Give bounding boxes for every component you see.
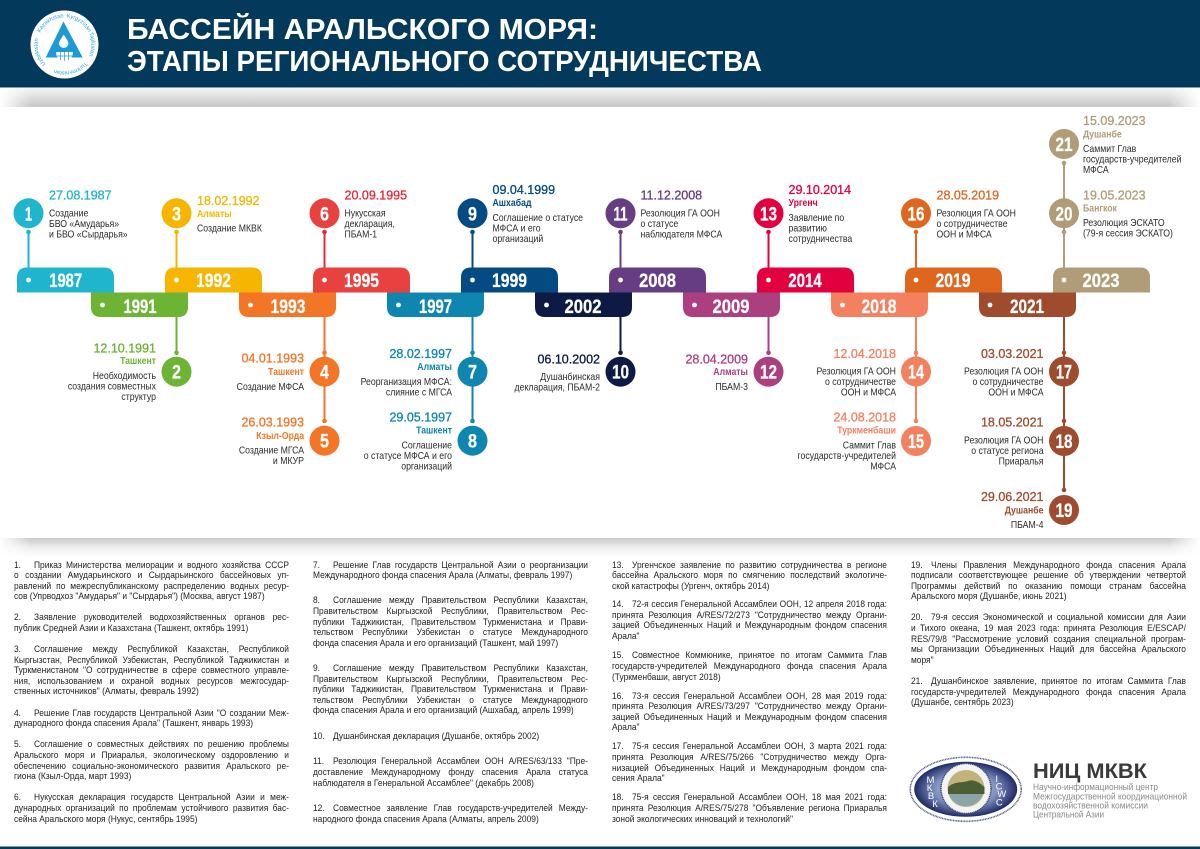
event 16: 28.05.2019 — [936, 188, 999, 202]
event 2 — [68, 317, 192, 402]
year block 1997: 1997 — [419, 296, 452, 318]
events 14 and 15: Саммит Глав — [843, 440, 896, 451]
logo: ICWC emblem: К — [927, 783, 933, 794]
year block 2002: 2002 — [564, 296, 602, 318]
events 4 and 5 — [237, 317, 340, 466]
events 7 and 8: Алматы — [417, 362, 452, 372]
event 16: 16 — [908, 203, 925, 225]
event 12: 28.04.2009 — [685, 352, 748, 366]
event 13: развитию — [788, 223, 827, 234]
ICWC organisation name: НИЦ МКВК — [1033, 760, 1147, 783]
event 3: Создание МКВК — [197, 223, 262, 234]
year block 2018: 2018 — [862, 296, 897, 318]
event 13: Ургенч — [788, 198, 818, 208]
event 9: Ашхабад — [493, 198, 532, 208]
events 4 and 5: 4 — [320, 362, 329, 384]
footnote 7 — [313, 561, 588, 581]
year block 1991: 1991 — [124, 296, 157, 318]
events 20 and 21: государств-учредителей — [1083, 154, 1181, 165]
logo: ICWC emblem: В — [928, 791, 934, 802]
event 6: 6 — [320, 203, 329, 225]
events 14 and 15: ООН и МФСА — [841, 387, 897, 398]
logo: ICWC emblem: W — [997, 789, 1006, 800]
event 3 — [162, 194, 262, 268]
event 3: 3 — [172, 203, 181, 225]
events 17, 18 and 19: Резолюция ГА ООН — [964, 435, 1044, 446]
event 1: Создание — [49, 208, 88, 219]
events 20 and 21: МФСА — [1083, 165, 1109, 175]
event 1: 1 — [25, 203, 32, 225]
event 3: Алматы — [197, 209, 232, 219]
footnote 8 — [313, 596, 588, 649]
events 14 and 15: 15 — [908, 431, 924, 453]
events 7 and 8: 29.05.1997 — [389, 410, 452, 424]
event 16: Резолюция ГА ООН — [936, 208, 1016, 219]
footnote 2 — [14, 613, 289, 634]
event 9: Соглашение о статусе — [493, 213, 583, 223]
year block 2021: 2021 — [1010, 296, 1044, 318]
title: БАССЕЙН АРАЛЬСКОГО МОРЯ: — [127, 12, 598, 46]
events 20 and 21: Бангкок — [1083, 203, 1117, 214]
footnote 18 — [612, 793, 887, 825]
event 16: ООН и МФСА — [936, 229, 993, 240]
footnote 4 — [14, 709, 289, 729]
year block 2019 — [905, 268, 1002, 292]
event 2: создания совместных — [68, 381, 156, 392]
events 14 and 15: государств-учредителей — [798, 451, 896, 461]
event 6: ПБАМ-1 — [345, 229, 377, 240]
event 11: о статусе — [640, 219, 678, 229]
event 2: структур — [121, 392, 156, 402]
events 17, 18 and 19: ПБАМ-4 — [1011, 520, 1043, 530]
events 20 and 21: 19.05.2023 — [1083, 188, 1146, 202]
events 17, 18 and 19: 18.05.2021 — [981, 416, 1044, 430]
events 4 and 5: 04.01.1993 — [241, 352, 304, 366]
events 7 and 8: 7 — [468, 362, 477, 384]
ICWC organisation name: водохозяйственной комиссии — [1033, 800, 1148, 810]
event 10 — [515, 317, 636, 393]
footnote 19 — [911, 561, 1186, 602]
year block 2008: 2008 — [639, 270, 676, 292]
events 4 and 5: 26.03.1993 — [241, 416, 304, 430]
year block 2021 — [979, 292, 1076, 318]
event 6: Нукусская — [345, 208, 386, 219]
events 14 and 15: Туркменбаши — [837, 425, 896, 436]
event 12: Алматы — [713, 367, 748, 377]
event 6: 20.09.1995 — [344, 188, 407, 202]
events 7 and 8: слияние с МГСА — [386, 387, 453, 398]
footnote 12 — [313, 804, 588, 825]
year block 1995: 1995 — [344, 270, 379, 292]
event 10: 06.10.2002 — [537, 352, 600, 366]
year block 1991 — [91, 292, 188, 318]
event 9: 09.04.1999 — [492, 183, 555, 197]
events 7 and 8: Ташкент — [416, 425, 452, 436]
logo: IFAS emblem: TurkmenistanUzbekistanKazakhstan Kyrgyzstan Tajikistan — [34, 14, 96, 76]
title: ЭТАПЫ РЕГИОНАЛЬНОГО СОТРУДНИЧЕСТВА — [127, 46, 762, 78]
event 13: Заявление по — [788, 213, 844, 223]
event 13: 13 — [760, 203, 777, 225]
year block 1999: 1999 — [492, 270, 527, 292]
logo: ICWC emblem: C — [996, 798, 1003, 808]
footnote 13 — [612, 561, 887, 592]
year block 2014: 2014 — [788, 270, 822, 292]
event 1: БВО «Амударья» — [49, 219, 119, 229]
events 4 and 5: и МКУР — [273, 456, 304, 466]
event 9 — [458, 183, 583, 268]
year block 1997 — [387, 292, 484, 318]
ICWC organisation name: Центральной Азии — [1033, 810, 1104, 820]
footnote 11 — [313, 757, 588, 789]
events 20 and 21: 21 — [1056, 134, 1073, 156]
events 20 and 21: (79-я сессия ЭСКАТО) — [1083, 228, 1173, 239]
year block 1993 — [239, 292, 336, 318]
footnote 1 — [14, 561, 289, 602]
event 9: организаций — [493, 234, 543, 244]
events 4 and 5: 5 — [320, 431, 329, 453]
year block 2023: 2023 — [1082, 270, 1120, 292]
events 17, 18 and 19: Приаралья — [999, 456, 1043, 467]
header banner — [0, 0, 1200, 88]
footnote 6 — [14, 793, 289, 825]
event 2: 2 — [172, 362, 181, 384]
events 17, 18 and 19: о статусе региона — [971, 446, 1044, 456]
year block 2023 — [1053, 268, 1150, 292]
events 7 and 8: Соглашение — [402, 440, 452, 451]
events 14 and 15: 14 — [908, 362, 924, 384]
logo: ICWC emblem: I — [995, 774, 998, 785]
events 14 and 15: 24.08.2018 — [833, 410, 896, 424]
event 1 — [14, 188, 128, 268]
event 2: Необходимость — [93, 371, 156, 381]
footnote 9 — [313, 664, 588, 716]
footnote 15 — [612, 651, 887, 683]
footnote 21 — [911, 677, 1186, 708]
year block 1987 — [17, 268, 114, 292]
event 10: 10 — [612, 362, 629, 384]
footnote 3 — [14, 645, 289, 697]
shadow band bottom — [0, 538, 1200, 558]
events 14 and 15: о сотрудничестве — [825, 377, 896, 387]
event 6: декларация, — [345, 219, 395, 229]
events 7 and 8: Реорганизация МФСА: — [361, 377, 452, 387]
year block 2009: 2009 — [712, 296, 750, 318]
event 13: сотрудничества — [788, 234, 853, 244]
year block 1992 — [165, 268, 262, 292]
year block 2008 — [609, 268, 706, 292]
event 16: о сотрудничестве — [936, 219, 1008, 229]
event 12 — [685, 317, 784, 392]
events 17, 18 and 19: 19 — [1056, 500, 1073, 522]
year block 2014 — [757, 268, 854, 292]
event 1: и БВО «Сырдарья» — [49, 229, 128, 240]
events 17, 18 and 19: Резолюция ГА ООН — [964, 366, 1044, 377]
footnote 16 — [612, 692, 887, 733]
logo: ICWC emblem: М — [927, 775, 935, 786]
events 17, 18 and 19: 29.06.2021 — [981, 490, 1044, 504]
events 4 and 5: Кзыл-Орда — [256, 431, 305, 441]
events 17, 18 and 19: 17 — [1056, 362, 1072, 384]
event 9: 9 — [468, 203, 477, 225]
event 3: 18.02.1992 — [197, 194, 260, 208]
events 7 and 8: 8 — [468, 431, 477, 453]
event 10: декларация, ПБАМ-2 — [515, 382, 600, 393]
event 12: ПБАМ-3 — [715, 382, 748, 392]
ICWC organisation name: Научно-информационный центр — [1033, 782, 1158, 792]
events 7 and 8: 28.02.1997 — [389, 347, 452, 361]
logo: ICWC emblem: К — [932, 799, 938, 810]
event 1: 27.08.1987 — [49, 188, 112, 202]
event 10: Душанбинская — [540, 372, 600, 382]
event 2: Ташкент — [120, 356, 156, 366]
events 20 and 21: Душанбе — [1083, 129, 1122, 140]
events 4 and 5: Создание МГСА — [239, 445, 305, 456]
events 7 and 8: организаций — [401, 461, 452, 472]
events 20 and 21 — [1049, 114, 1181, 268]
events 7 and 8: о статусе МФСА и его — [364, 451, 452, 461]
events 7 and 8 — [361, 317, 488, 472]
event 11: 11 — [614, 203, 628, 225]
event 16 — [901, 188, 1016, 268]
events 4 and 5: Создание МФСА — [237, 382, 305, 392]
events 17, 18 and 19 — [964, 317, 1079, 530]
year block 1993: 1993 — [270, 296, 306, 318]
event 11: 11.12.2008 — [640, 188, 702, 202]
year block 1999 — [461, 268, 558, 292]
footnote 5 — [14, 740, 289, 782]
footnote 17 — [612, 742, 887, 784]
year block 1995 — [313, 268, 410, 292]
events 17, 18 and 19: 18 — [1056, 431, 1073, 453]
event 6 — [310, 188, 407, 268]
year block 2002 — [535, 292, 632, 318]
event 2: 12.10.1991 — [93, 342, 156, 356]
events 17, 18 and 19: о сотрудничестве — [972, 377, 1043, 387]
event 13: 29.10.2014 — [788, 183, 851, 197]
events 20 and 21: Резолюция ЭСКАТО — [1083, 218, 1165, 228]
ICWC organisation name — [1033, 760, 1187, 820]
events 17, 18 and 19: ООН и МФСА — [988, 387, 1044, 398]
footnote 14 — [612, 600, 887, 642]
shadow band top — [0, 88, 1200, 107]
ICWC organisation name: Межгосударственной координационной — [1033, 791, 1187, 801]
title — [127, 12, 762, 78]
event 11 — [606, 188, 723, 268]
logo: ICWC emblem — [910, 757, 1021, 821]
event 13 — [754, 183, 853, 268]
events 14 and 15 — [798, 317, 931, 472]
events 17, 18 and 19: Душанбе — [1005, 505, 1043, 516]
year block 1987: 1987 — [49, 270, 82, 292]
event 9: МФСА и его — [493, 223, 541, 234]
events 20 and 21: 20 — [1056, 203, 1073, 225]
footnote 20 — [911, 613, 1186, 666]
events 4 and 5: Ташкент — [268, 367, 304, 377]
year block 1992: 1992 — [196, 270, 231, 292]
footer bar — [0, 846, 1200, 849]
year block 2009 — [683, 292, 780, 318]
events 14 and 15: 12.04.2018 — [833, 347, 896, 361]
year block 2018 — [831, 292, 928, 318]
events 14 and 15: Резолюция ГА ООН — [817, 366, 896, 377]
event 11: наблюдателя МФСА — [640, 229, 723, 240]
events 20 and 21: 15.09.2023 — [1083, 114, 1146, 128]
year block 2019: 2019 — [936, 270, 971, 292]
logo: ICWC emblem: C — [996, 782, 1003, 792]
events 14 and 15: МФСА — [870, 461, 897, 472]
events 17, 18 and 19: 03.03.2021 — [981, 347, 1044, 361]
event 11: Резолюция ГА ООН — [640, 208, 720, 219]
events 20 and 21: Саммит Глав — [1083, 144, 1136, 154]
event 12: 12 — [760, 362, 777, 384]
